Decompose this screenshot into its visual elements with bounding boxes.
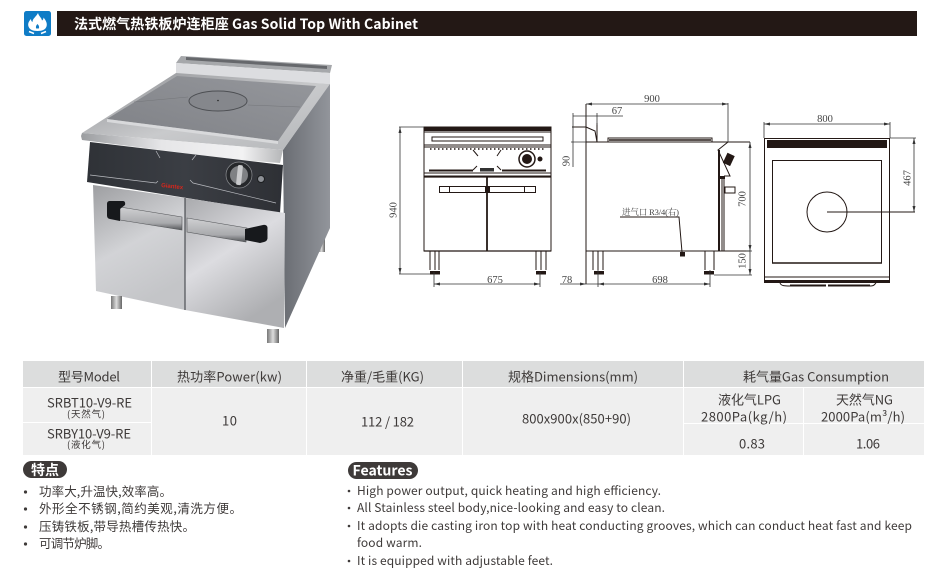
table header row: 规格Dimensions(mm) xyxy=(508,366,638,386)
brand logo: Giantex xyxy=(161,183,184,191)
text block: English features list: All Stainless steel body,nice-looking and easy to clean. xyxy=(357,499,665,516)
front lip xyxy=(81,133,283,163)
gas inlet note: 进气口 R3/4(右) xyxy=(622,207,679,217)
dimension: height 940: 940 xyxy=(388,202,399,218)
dimension: depth 900: 900 xyxy=(644,94,660,105)
table body: (液化气) xyxy=(67,437,105,451)
gas knob xyxy=(723,153,735,193)
dimension: 90: 90 xyxy=(561,156,572,166)
dimension: 700 and 150: 150 xyxy=(737,253,748,269)
door gap xyxy=(184,198,186,310)
rear legs xyxy=(318,228,325,252)
left handle xyxy=(107,201,182,230)
dimension: depth 900 xyxy=(586,94,728,142)
table body: 天然气NG xyxy=(836,390,893,408)
text block: Chinese features list: 可调节炉脚。 xyxy=(39,533,110,552)
table body: 2800Pa(kg/h) xyxy=(701,406,787,426)
door split xyxy=(486,177,488,251)
handles xyxy=(440,186,536,192)
table body: SRBT10-V9-RE xyxy=(47,392,132,412)
legs xyxy=(593,251,714,274)
drawing: top view xyxy=(764,114,916,286)
dimension: 67: 67 xyxy=(612,106,622,117)
drawing: front view xyxy=(388,127,551,287)
dimension: 467: 467 xyxy=(902,170,913,186)
dimension: 78 and 698: 78 xyxy=(562,275,572,286)
heading: English features: Features xyxy=(352,460,413,480)
table body: SRBY10-V9-RE xyxy=(47,424,131,442)
table body: 1.06 xyxy=(856,434,880,452)
dimension: 78 and 698 xyxy=(560,270,710,287)
back splash xyxy=(176,56,332,84)
specification table xyxy=(23,361,924,455)
cooking plate xyxy=(107,76,316,144)
table body: 0.83 xyxy=(739,434,765,452)
right handle xyxy=(187,218,268,243)
gas inlet note xyxy=(620,207,685,256)
right door xyxy=(185,198,285,328)
dimension: 67 xyxy=(573,106,623,125)
top surface xyxy=(82,73,330,150)
title bar: 法式燃气热铁板炉连柜座 Gas Solid Top With Cabinet xyxy=(74,14,418,34)
table header row: 热功率Power(kw) xyxy=(177,366,282,386)
dimension: height 940 xyxy=(388,127,430,274)
product photo: gas solid top with cabinet xyxy=(81,56,332,343)
brand logo xyxy=(480,168,494,172)
drawing: side view xyxy=(560,94,752,287)
control knob xyxy=(226,162,252,188)
left door xyxy=(93,185,185,310)
text block: Chinese features list: 压铸铁板,带导热槽传热快。 xyxy=(39,516,195,535)
dimension: width 675: 675 xyxy=(487,275,503,286)
table body: 112 / 182 xyxy=(361,412,414,430)
text block: English features list: It is equipped with adjustable feet. xyxy=(357,552,553,569)
heading: Chinese features: 特点 xyxy=(31,460,59,480)
control panel xyxy=(87,142,283,213)
text block: English features list: food warm. xyxy=(357,534,422,551)
table body: 液化气LPG xyxy=(718,390,781,408)
table body: 2000Pa(m³/h) xyxy=(821,406,905,426)
igniter xyxy=(258,176,264,182)
table header row: 净重/毛重(KG) xyxy=(341,366,424,386)
table header row: 耗气量Gas Consumption xyxy=(743,366,889,386)
text block: English features list: High power output, quick heating and high efficiency. xyxy=(357,482,661,499)
table body: 800x900x(850+90) xyxy=(522,408,631,428)
icon: flame xyxy=(24,11,51,36)
side panel xyxy=(283,83,330,328)
knob xyxy=(519,151,535,167)
text block: English features list xyxy=(348,482,912,569)
dimension: 700 and 150: 700 xyxy=(737,191,748,207)
dimension: 78 and 698: 698 xyxy=(652,275,668,286)
table header row xyxy=(23,361,924,387)
dimension: 467 xyxy=(890,138,916,212)
burner circle xyxy=(807,192,847,232)
text block: English features list: It adopts die casting iron top with heat conducting grooves, which can conduct heat fast and keep xyxy=(357,517,912,534)
dimension: width 800 xyxy=(764,114,890,138)
title bar xyxy=(57,11,917,36)
table header row: 型号Model xyxy=(58,366,120,386)
dimension: width 800: 800 xyxy=(817,114,833,125)
legs xyxy=(430,251,546,274)
table body xyxy=(23,388,924,455)
heading: Chinese features xyxy=(23,460,67,480)
igniter xyxy=(538,156,542,162)
dimension: 90 xyxy=(561,113,586,167)
front legs xyxy=(111,296,279,343)
text block: Chinese features list: 外形全不锈钢,简约美观,清洗方便。 xyxy=(39,498,242,517)
text block: Chinese features list: 功率大,升温快,效率高。 xyxy=(39,481,172,500)
table body: 10 xyxy=(222,410,237,430)
dimension: width 675 xyxy=(434,272,540,287)
dimension: 700 and 150 xyxy=(714,142,752,275)
table body: (天然气) xyxy=(67,406,105,420)
text block: Chinese features list xyxy=(24,481,242,552)
